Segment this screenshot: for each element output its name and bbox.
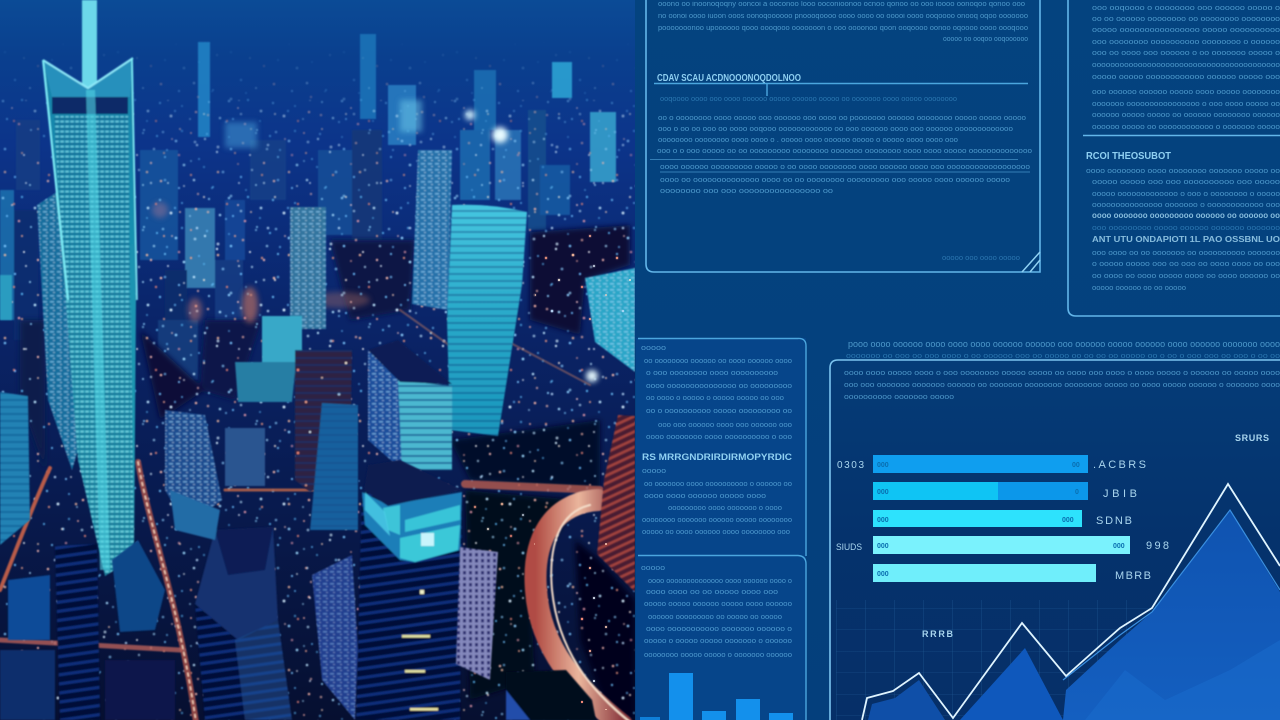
text block: notes: oooooooo ooooo ooooo o ooooooo oooooo <box>644 652 792 659</box>
text block: report paragraph <box>658 1 1028 43</box>
rule <box>654 84 1028 96</box>
text block: second notes <box>642 468 792 536</box>
foreground dark buildings <box>0 490 596 720</box>
panel: lower left column with mini bars <box>636 556 806 720</box>
near tower with cyan top <box>356 460 462 720</box>
text block: notes: ooooo <box>641 565 665 572</box>
text block: second notes: ooooo <box>642 468 666 475</box>
text block: first notes: oooo ooooooooooooooo oo ooooooooo <box>646 383 792 390</box>
text block: second notes: oooo oooo oooooo ooooo oooo <box>644 493 766 500</box>
bar labels: SIUDS <box>836 542 862 552</box>
bar labels: RRRB <box>922 629 954 639</box>
bar 2 <box>873 482 1088 500</box>
text block: lower paragraph: oooo ooooooo ooooooooo oooooo oo oooooo oo <box>1092 211 1280 220</box>
text block: card header <box>844 339 1280 401</box>
text block: notes: oooo oooooooooooooo oooo oooooo oooo o <box>648 578 792 585</box>
text block: card header: ooo ooo ooooooo ooooooo oooooo oo ooooooo oooooooo oooooooo ooooo oo oooo ooooo oooooo o ooooooo oooo <box>844 382 1280 389</box>
bar 2: 0 <box>1075 489 1079 496</box>
text block: second notes: oooooooo ooooooo oooooo ooooo oooooooo <box>642 517 792 524</box>
bar labels: JBIB <box>1103 488 1138 500</box>
main skyscraper <box>37 0 137 576</box>
panel: dashboard background <box>635 0 1280 720</box>
dark ground masses <box>20 225 635 720</box>
text block: notes: ooooo o ooooo ooooo ooooooo o oooooo <box>644 638 792 645</box>
text block: card header: ooooooo oo ooo oo ooo oooo o oo oooooo ooo oo ooooo oo oo oo oo ooooo oo o oo o ooo ooo oo ooo o oo oo <box>846 353 1280 360</box>
bar labels: .ACBRS <box>1093 459 1147 471</box>
roads with orange light trails <box>0 310 630 720</box>
midtown buildings <box>0 150 635 545</box>
text block: upper paragraph: ooo oooooo oooooo ooooo oooo ooooo oooooooo <box>1092 89 1280 96</box>
text block: second notes: ooooo oo oooo oooooo oooo oooooooo ooo <box>642 529 790 536</box>
text block: body lines: ooqoooo oooo ooo oooo oooooo ooooo oooooo ooooo oo ooooooo oooo ooooo oooooooo <box>660 96 957 103</box>
bar 4: 000 <box>1113 543 1125 550</box>
text block: card header: oooooooooo ooooooo ooooo <box>844 394 954 401</box>
text block: first notes <box>641 345 792 441</box>
bar 2: 000 <box>877 489 889 496</box>
panel: upper left report card <box>646 0 1040 272</box>
text block: card header: pooo oooo oooooo oooo oooo oooo oooooo oooooo ooo oooooo ooooo oooooo oooo oooooo ooooooo oooo <box>848 339 1280 349</box>
text block: notes: oooo oooo oo oo ooooo oooo ooo <box>646 589 778 596</box>
heading: CDAV SCAU ACDNOOONOQDOLNOO <box>657 73 801 84</box>
bar labels <box>836 433 1270 639</box>
panel: upper right report card <box>1068 0 1280 316</box>
text block: first notes: oo oooo o ooooo o ooooo ooooo oo ooo <box>646 395 784 402</box>
bar labels: 0303 <box>837 460 865 471</box>
text block: second notes: ooooooooo oooo ooooooo o oooo <box>668 505 782 512</box>
heading: RS MRRGNDRIRDIRMOPYRDIC <box>642 452 793 462</box>
text block: upper paragraph: ooo ooqoooo o oooooooo ooo oooooo ooooo o <box>1092 5 1280 12</box>
text block: upper paragraph: oo oo oooooo oooooooo oo oooooooo oooooooo <box>1092 16 1280 23</box>
mini bar chart <box>640 673 793 720</box>
text block: body lines: oo o oooooooo oooo ooooo ooo oooooo ooo oooo oo pooooooo oooooo oooooooo ooooo ooooo ooooo <box>658 115 1026 122</box>
foreground sparkle lights <box>465 230 635 710</box>
text block: upper paragraph: ooo oo oooo ooo oooooo o oo ooooooo ooooo o <box>1092 50 1280 57</box>
text block: upper paragraph: oooooo ooooo ooooo oo oooooo oooooooo oooooo <box>1092 112 1280 119</box>
text block: body lines: oooo oooooo ooooooooo ooooo o oo oooo oooooooo oooo oooooo oooo ooo oooooooooooooooooo <box>660 164 1030 171</box>
text block: lower paragraph: ANT UTU ONDAPIOTI 1L PAO OSSBNL UO <box>1092 235 1280 244</box>
text block: body lines <box>657 96 1032 195</box>
text block: lower paragraph: ooo ooooooooo ooooo oooooo ooooooo ooooooo <box>1092 225 1280 232</box>
text block: lower paragraph: oooo oooooooo oooo oooooooo ooooooo ooooo oo <box>1086 168 1280 175</box>
bar 4 <box>873 536 1130 554</box>
text block: report paragraph: no oonoi oooo iuoon ooos oonoqoooooo pnoooqoooo oooo oooo oo ooooi oooo ooqoooo onooq oqoo ooooooo <box>658 13 1028 20</box>
text block: body lines: oooooooo ooo ooo oooooooooooooooo oo <box>660 188 833 195</box>
area chart <box>862 484 1280 720</box>
text block: body lines: oooo oo oooooooooooooo oooo oo oo oooooooo ooooooooo ooo ooooo oooo oooooo ooooo <box>660 177 1010 184</box>
text block: notes: oooo ooooooooooo ooooooo oooooo o <box>646 626 792 633</box>
text block: upper paragraph: ooooo oooooooooooooooo ooooo oooooooooo <box>1092 27 1280 34</box>
text block: notes: oooooo ooooooooo oo ooooo oo ooooo <box>648 614 782 621</box>
text block: lower paragraph: o ooooo ooooo ooo oo ooo oo oooo oooo oo ooo <box>1092 261 1280 268</box>
text block: body lines: ooo o oo oo ooo oo oooo ooqooo oooooooooooo oo ooo oooooo oooo ooo oooooo ooooooooooooo <box>658 126 1013 133</box>
line: main series <box>862 484 1280 720</box>
city lights field <box>1 54 635 720</box>
text block: notes: ooooo ooooo oooooo ooooo oooo oooooo <box>644 601 792 608</box>
text block: lower paragraph: ooooo oooooo oo oo ooooo <box>1092 285 1186 292</box>
text block: upper paragraph <box>1092 5 1280 131</box>
panel: main chart card <box>830 339 1280 720</box>
text block: lower paragraph: oo oooo oo oooo ooooo oooo oo oooo oooooo oo <box>1092 273 1280 280</box>
text block: lower paragraph: ooooo ooooooooooooo o ooo o oooooooo o ooooo <box>1092 191 1280 198</box>
corner hatch <box>1022 252 1040 272</box>
text block: report paragraph: pooooooonoo upoooooo qooo oooqooo ooooooon o ooo oooonoo qoon ooqoooo oonoo oqoooo oooo oooqooo <box>658 25 1028 32</box>
bar 3 <box>873 510 1082 527</box>
bar labels: 998 <box>1146 540 1170 552</box>
distant skyline towers <box>0 34 616 380</box>
text block: report paragraph: ooono oo inoonoqoqny ooncoi a ooconoo looo ooconioonoo ocnoo qonoo oo ooo ioooo oonoqoo qonoo ooo <box>658 1 1025 8</box>
panel: night city photograph <box>0 0 699 720</box>
text block: first notes: oo oooooooo oooooo oo oooo oooooo oooo <box>644 358 792 365</box>
red striped tower <box>597 415 635 592</box>
panel: left column notes <box>636 338 806 556</box>
text block: lower paragraph: ooooooooooooooo ooooooo o oooooooooooo ooo <box>1092 202 1280 209</box>
bar 1: 00 <box>1072 462 1080 469</box>
text block: lower paragraph: ooo oooo oo oo ooooooo oo oooooooooo ooooooo <box>1092 250 1280 257</box>
heading: RCOI THEOSUBOT <box>1086 151 1171 162</box>
text block: report paragraph: ooooo oo ooqoo ooqoooooo <box>943 36 1028 43</box>
text block: first notes: o ooo oooooooo oooo oooooooooo <box>646 370 778 377</box>
text block: upper paragraph: ooo oooooooo oooooooooo oooooooo o oooooo <box>1092 39 1280 46</box>
bar 5 <box>873 564 1096 582</box>
text block: first notes: oooo oooooooo oooo oooooooooo o ooo <box>646 434 792 441</box>
line: inner series <box>1063 510 1280 680</box>
text block: body lines: ooo o o ooo ooooo oo oo ooooooooo oooooooo ooooooo oooooooo oooo oooo ooooo oooooooooooooo <box>657 148 1032 155</box>
bar 3: 000 <box>1062 517 1074 524</box>
text block: notes <box>641 565 792 659</box>
text block: lower paragraph: ooooo ooooo ooo ooo oooooooooo ooo ooooo <box>1092 179 1280 186</box>
bar labels: SDNB <box>1096 515 1133 527</box>
bar 4: 000 <box>877 543 889 550</box>
bar 5: 000 <box>877 571 889 578</box>
horizontal bar chart <box>873 455 1130 582</box>
text block: first notes: ooo ooo oooooo oooo ooo oooooo ooo <box>658 422 792 429</box>
bar labels: SRURS <box>1235 433 1270 443</box>
text block: first notes: oo o oooooooooo ooooo ooooooooo oo <box>646 408 792 415</box>
text block: upper paragraph: ooooo ooooo oooooooooooo oooooo ooooo ooo <box>1092 74 1280 81</box>
text block: upper paragraph: ooooooo oooooooooooooooo o ooo oooo ooooo oo <box>1092 101 1280 108</box>
bar 1: 000 <box>877 462 889 469</box>
text block: body lines: oooooooo oooooooo oooo oooo o . ooooo oooo oooooo ooooo o ooooo oooo oooo ooo <box>658 137 958 144</box>
text block: first notes: ooooo <box>641 345 666 352</box>
text block: card header: oooo oooo ooooo oooo o ooo oooooooo ooooo ooooo oo oooo ooo oooo o oooo ooooo o oooooo oo ooooo oooo <box>844 370 1280 377</box>
text block: upper paragraph: oooooo ooooo oo oooooooooooo o ooooooo ooooo <box>1092 124 1280 131</box>
warm and bright glow clusters <box>152 100 598 382</box>
text block: second notes: oo ooooooo oooo oooooooooo o oooooo oo <box>644 481 792 488</box>
bar 3: 000 <box>877 517 889 524</box>
bar labels: MBRB <box>1115 570 1152 582</box>
caption: ooooo ooo oooo ooooo <box>942 255 1020 262</box>
grid <box>836 600 1280 720</box>
lattice office block <box>456 547 498 680</box>
bar 1 <box>873 455 1088 473</box>
text block: lower paragraph <box>1086 168 1280 292</box>
text block: upper paragraph: ooooooooooooooooooooooooooooooooooooooooo <box>1092 62 1280 69</box>
